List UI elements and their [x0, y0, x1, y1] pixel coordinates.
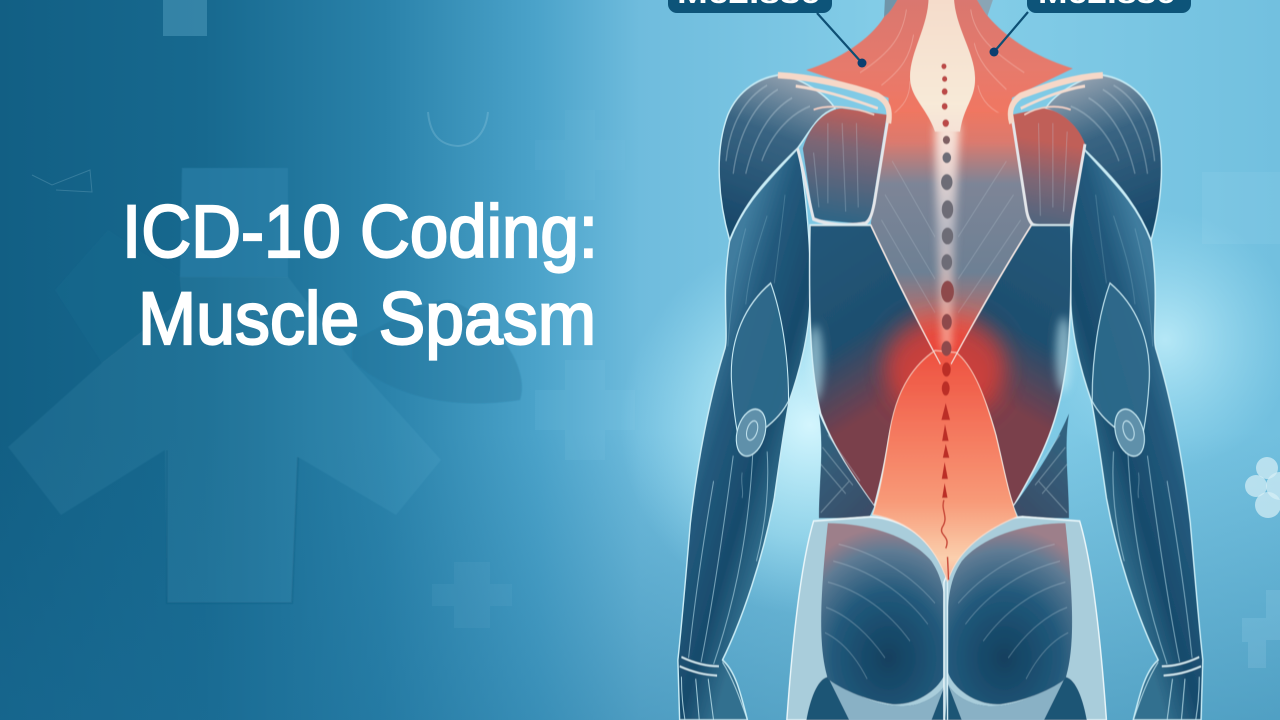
lower half of body: hip and gluteal — [787, 517, 949, 720]
trapezius fibres — [860, 9, 1024, 169]
title: ICD-10 Coding: — [122, 190, 598, 273]
right arm and deltoid mirrored — [1046, 75, 1203, 720]
callout: right neck label — [990, 0, 1191, 56]
centre muscle fibres — [881, 161, 1021, 313]
left hip panel — [787, 517, 949, 720]
red spasm glow mid back — [885, 317, 1006, 418]
left arm — [678, 148, 810, 720]
right flank mirrored — [1014, 414, 1069, 518]
right latissimus — [951, 225, 1071, 506]
left deltoid fibres — [726, 85, 810, 174]
icon: star of life watermark — [8, 168, 522, 603]
neck behind the traps — [884, 0, 994, 20]
centre line between glutes — [945, 582, 949, 720]
left wrist band — [680, 657, 719, 676]
left hand — [681, 662, 747, 720]
left thigh — [806, 677, 948, 720]
left gluteal muscle — [821, 523, 946, 704]
left gluteal pale band — [828, 677, 946, 720]
title: Muscle Spasm — [138, 277, 596, 360]
spine vertebrae — [941, 63, 954, 580]
left latissimus — [810, 225, 940, 506]
icon: pale flower glyph at right edge — [1245, 457, 1280, 518]
left gluteal fibres — [825, 544, 935, 679]
left deltoid — [719, 75, 835, 240]
flank group — [819, 414, 874, 518]
left shoulder ridge — [778, 75, 889, 123]
right hip and gluteal mirrored — [944, 517, 1106, 720]
figure: back muscle anatomy — [678, 0, 1203, 720]
lumbar inflamed area — [872, 351, 1017, 582]
torso edge light glow — [807, 317, 1071, 401]
outer half of body: arm and deltoid — [678, 75, 835, 720]
title — [122, 190, 598, 360]
upper and mid back centre muscle — [871, 113, 1031, 372]
central spine strip lower fade — [935, 123, 960, 351]
right shoulder ridge — [1010, 75, 1103, 123]
central cream spine strip top — [910, 0, 975, 132]
left scapula panel — [797, 108, 889, 225]
left forearm fibres — [689, 195, 785, 664]
trapezius neck and shoulders — [806, 0, 1073, 237]
lumbar glow edge — [871, 225, 1031, 364]
left biceps oval — [731, 283, 789, 441]
right scapula panel — [1012, 108, 1085, 227]
left elbow — [731, 404, 771, 461]
callout: left neck label — [668, 0, 866, 68]
